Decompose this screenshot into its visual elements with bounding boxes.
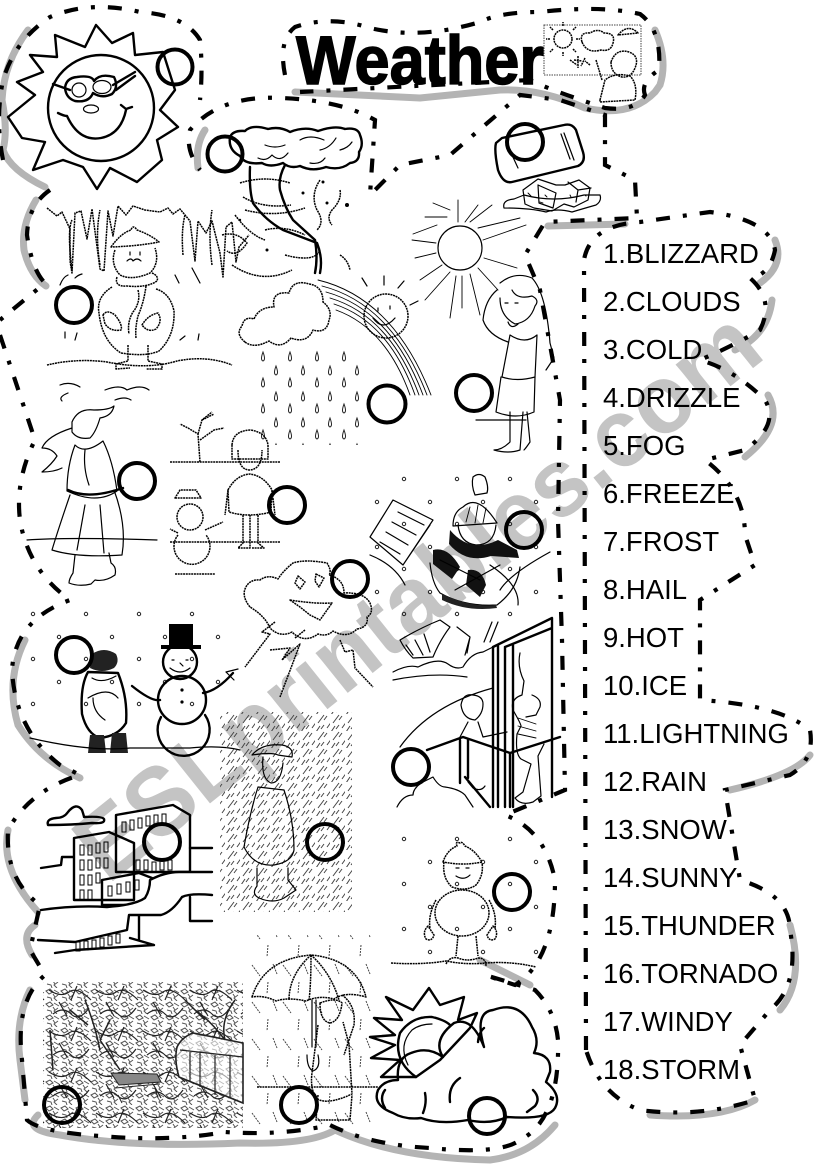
word list: 13.SNOW	[603, 814, 727, 845]
dashed outline: sun panel	[0, 7, 202, 160]
word list	[603, 238, 789, 1085]
scene: frozen boy under icicles	[47, 206, 249, 369]
word list: 10.ICE	[603, 670, 687, 701]
scene: man in heavy rain	[220, 712, 352, 912]
scene: man with snow shovel	[365, 470, 555, 620]
scene: rainbow, cloud and rain	[239, 276, 431, 445]
word list: 1.BLIZZARD	[603, 238, 759, 269]
word list: 17.WINDY	[603, 1006, 733, 1037]
word list: 12.RAIN	[603, 766, 707, 797]
scene: storm cloud with lightning	[244, 561, 373, 697]
icon: ice block and cubes	[495, 125, 600, 212]
word list: 15.THUNDER	[603, 910, 776, 941]
scene: child with umbrella	[250, 935, 378, 1125]
word list: 16.TORNADO	[603, 958, 778, 989]
scene: children at balcony door	[393, 618, 560, 807]
scene: windy woman	[27, 383, 157, 585]
icon: teacher with weather board	[544, 22, 641, 102]
answer circles	[44, 50, 543, 1134]
scene: snow boy	[385, 825, 550, 967]
word list: 3.COLD	[603, 334, 702, 365]
word list: 9.HOT	[603, 622, 684, 653]
scene: sun and girl	[412, 200, 554, 452]
icon: sun with glasses	[8, 25, 178, 189]
scene: bare tree, girl and small snowman	[170, 412, 280, 574]
word list: 7.FROST	[603, 526, 719, 557]
dashed outline: worksheet panel	[0, 95, 637, 1150]
word list: 5.FOG	[603, 430, 686, 461]
scene: flooded city	[38, 805, 212, 953]
scene: storm in the forest	[43, 982, 243, 1128]
word list: 8.HAIL	[603, 574, 687, 605]
word list: 2.CLOUDS	[603, 286, 741, 317]
word list: 6.FREEZE	[603, 478, 734, 509]
word list: 14.SUNNY	[603, 862, 738, 893]
dashed outline: title panel	[283, 9, 659, 109]
icon: tornado	[222, 127, 362, 276]
title: Weather	[296, 22, 544, 99]
scene: boy and big snowman	[30, 610, 240, 756]
word list: 4.DRIZZLE	[603, 382, 741, 413]
word list: 18.STORM	[603, 1054, 740, 1085]
word list: 11.LIGHTNING	[603, 718, 789, 749]
scene: sun behind cloud	[370, 988, 557, 1122]
watermark: ESLprintables.com	[53, 288, 781, 901]
dashed outline: word list panel	[584, 212, 811, 1112]
